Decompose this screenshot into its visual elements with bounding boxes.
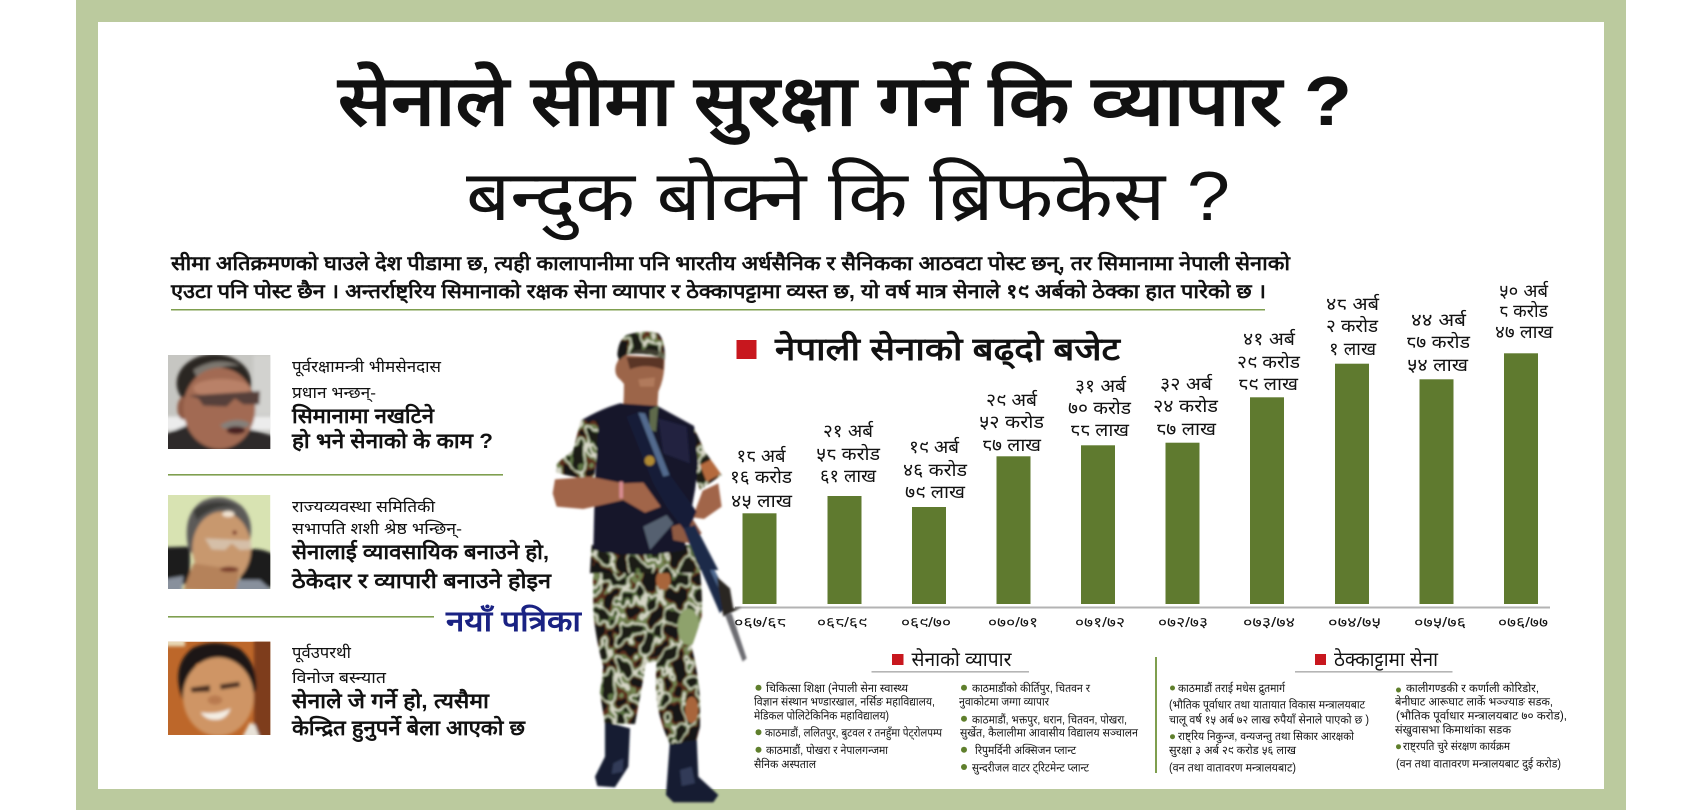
bar values: ६१ लाख xyxy=(820,466,876,486)
contracts list: कालीगण्डकी र कर्णाली कोरिडोर, xyxy=(1406,681,1539,695)
bar values xyxy=(730,280,1553,511)
business list: रिपुमर्दिनी अक्सिजन प्लान्ट xyxy=(975,743,1076,758)
intro text: एउटा पनि पोस्ट छैन । अन्तर्राष्ट्रिय सिमानाको रक्षक सेना व्यापार र ठेक्कापट्टामा व्यस्त छ, यो वर्ष मात्र सेनाले १९ अर्बको ठेक्का हात पारेको छ । xyxy=(170,279,1266,304)
bar values: ४१ अर्ब xyxy=(1243,328,1296,349)
year labels: ०७५/७६ xyxy=(1414,614,1466,630)
bar values: ३२ अर्ब xyxy=(1160,373,1213,394)
bar chart: army budget xyxy=(730,280,1553,630)
bullet markers xyxy=(1170,686,1401,749)
year labels xyxy=(734,614,1548,630)
quote text xyxy=(291,497,552,593)
soldier upper body xyxy=(553,328,723,575)
bar values: ४८ अर्ब xyxy=(1326,293,1380,314)
quote text: ठेकेदार र व्यापारी बनाउने होइन xyxy=(291,568,552,593)
soldier lower body xyxy=(590,543,747,802)
bar values: ८ करोड xyxy=(1499,300,1548,321)
contracts list: बेनीघाट आरूघाट लार्के भञ्ज्याङ सडक, xyxy=(1395,695,1553,709)
business list: सैनिक अस्पताल xyxy=(754,757,816,771)
year labels: ०७६/७७ xyxy=(1498,614,1548,630)
newspaper name: नयाँ पत्रिका xyxy=(445,604,583,638)
contracts list: काठमाडौं तराई मधेस द्रुतमार्ग xyxy=(1178,681,1286,696)
year labels: ०६८/६९ xyxy=(817,614,867,630)
section heading: ठेक्काट्टामा सेना xyxy=(1334,648,1439,671)
bar values: ५८ करोड xyxy=(816,443,880,464)
bar values: ८७ लाख xyxy=(982,435,1041,455)
trousers xyxy=(590,543,707,750)
section heading xyxy=(1295,648,1452,673)
quote: Binoj Basnyat xyxy=(163,638,526,743)
bar values: ८८ लाख xyxy=(1070,420,1129,440)
business list: सुर्खेत, कैलालीमा आवासीय विद्यालय सञ्चालन xyxy=(960,726,1139,741)
business list: काठमाडौं, पोखरा र नेपालगन्जमा xyxy=(766,743,889,757)
bar values: २९ करोड xyxy=(1237,351,1300,372)
bar values: ४६ करोड xyxy=(903,459,967,480)
bar values: ८९ लाख xyxy=(1238,374,1298,394)
right arm xyxy=(693,483,722,519)
business list: विज्ञान संस्थान भण्डारखाल, नर्सिङ महाविद्यालय, xyxy=(754,695,935,709)
business list: नुवाकोटमा जग्गा व्यापार xyxy=(959,695,1049,710)
contracts list: (वन तथा वातावरण मन्त्रालयबाट दुई करोड) xyxy=(1396,756,1561,771)
bar values: ४४ अर्ब xyxy=(1411,309,1467,330)
year labels: ०७२/७३ xyxy=(1158,614,1208,630)
title: सेनाले सीमा सुरक्षा गर्ने कि व्यापार ? xyxy=(336,61,1352,145)
contracts list: (भौतिक पूर्वाधार मन्त्रालयबाट ७० करोड), xyxy=(1396,708,1567,723)
quote text: हो भने सेनाको के काम ? xyxy=(291,428,493,453)
quote text: प्रधान भन्छन्- xyxy=(292,385,376,403)
year labels: ०७३/७४ xyxy=(1243,614,1295,630)
bar values: ३१ अर्ब xyxy=(1075,375,1127,396)
bullet markers xyxy=(756,685,967,770)
quote text: केन्द्रित हुनुपर्ने बेला आएको छ xyxy=(291,715,526,743)
chart heading: नेपाली सेनाको बढ्दो बजेट xyxy=(774,330,1122,369)
bar values: ७९ लाख xyxy=(905,482,965,502)
cap xyxy=(615,328,667,362)
intro text: सीमा अतिक्रमणको घाउले देश पीडामा छ, त्यही कालापानीमा पनि भारतीय अर्धसैनिक र सैनिकका आठवटा पोस्ट छन्, तर सिमानामा नेपाली सेनाको xyxy=(170,251,1291,276)
bar values: ८७ लाख xyxy=(1156,419,1216,439)
bar values: ५४ लाख xyxy=(1407,355,1468,375)
business list: मेडिकल पोलिटेकिनिक महाविद्यालय) xyxy=(754,708,889,722)
quote text: विनोज बस्न्यात xyxy=(292,668,387,687)
quote text: सेनाले जे गर्ने हो, त्यसैमा xyxy=(291,688,491,713)
left arm xyxy=(553,477,661,513)
bar values: ४५ लाख xyxy=(731,491,792,511)
quote: Shashi Shrestha xyxy=(163,495,552,593)
contracts list: राष्ट्रपति चुरे संरक्षण कार्यक्रम xyxy=(1403,739,1511,754)
bars xyxy=(742,353,1538,604)
title: बन्दुक बोक्ने कि ब्रिफकेस ? xyxy=(466,157,1230,241)
quote text: पूर्वरक्षामन्त्री भीमसेनदास xyxy=(292,357,442,377)
business list xyxy=(754,681,1139,775)
contracts list: राष्ट्रिय निकुन्ज, वन्यजन्तु तथा सिकार आरक्षको xyxy=(1178,729,1355,744)
contracts list: सुरक्षा ३ अर्ब २९ करोड ५६ लाख xyxy=(1169,743,1297,758)
bar values: १८ अर्ब xyxy=(736,445,787,466)
title xyxy=(336,61,1352,241)
sleeves and waist camo xyxy=(553,418,723,575)
portrait: Binoj Basnyat xyxy=(168,642,270,735)
quote: Bhimsen Das Pradhan xyxy=(160,354,493,455)
business list: काठमाडौं, ललितपुर, बुटवल र तनहुँमा पेट्रोलपम्प xyxy=(765,726,942,741)
quote text: राज्यव्यवस्था समितिकी xyxy=(292,497,436,516)
bar values: २९ अर्ब xyxy=(986,389,1038,410)
contracts list: (वन तथा वातावरण मन्त्रालयबाट) xyxy=(1169,762,1296,774)
portrait: Shashi Shrestha xyxy=(168,495,270,589)
year labels: ०७४/७५ xyxy=(1328,614,1381,630)
section heading: सेनाको व्यापार xyxy=(912,648,1012,671)
bar values: ८७ करोड xyxy=(1406,331,1470,352)
business list: सुन्दरीजल वाटर ट्रिटमेन्ट प्लान्ट xyxy=(972,760,1089,775)
axis xyxy=(735,606,1550,608)
quote text xyxy=(291,357,493,453)
business list: चिकित्सा शिक्षा (नेपाली सेना स्वास्थ्य xyxy=(766,681,908,695)
bar values: २ करोड xyxy=(1326,315,1378,336)
bar values: ५२ करोड xyxy=(979,411,1044,432)
boots xyxy=(595,722,718,802)
section: army business xyxy=(754,648,1139,775)
intro text xyxy=(170,251,1291,304)
year labels: ०७०/७१ xyxy=(988,614,1038,630)
contracts list xyxy=(1169,681,1567,774)
contracts list: चालू वर्ष १५ अर्ब ७२ लाख रुपैयाँ सेनाले पाएको छ ) xyxy=(1169,712,1369,727)
section: army in contracts xyxy=(1169,648,1567,774)
bar values: १ लाख xyxy=(1329,339,1376,359)
quote text: सभापति शशी श्रेष्ठ भन्छिन्- xyxy=(292,519,462,539)
year labels: ०६९/७० xyxy=(901,614,951,630)
rifle barrel xyxy=(692,548,730,613)
quote text: सिमानामा नखटिने xyxy=(291,403,435,428)
bar values: २१ अर्ब xyxy=(823,420,874,441)
section heading xyxy=(872,648,1029,673)
quote text: सेनालाई व्यावसायिक बनाउने हो, xyxy=(291,539,549,564)
bar values: २४ करोड xyxy=(1153,395,1218,416)
bar values: ५० अर्ब xyxy=(1499,280,1549,301)
head xyxy=(615,355,664,407)
quote text: पूर्वउपरथी xyxy=(292,643,352,663)
year labels: ०६७/६८ xyxy=(734,614,786,630)
vest xyxy=(581,403,698,555)
portrait: Bhimsen Das Pradhan xyxy=(168,355,270,449)
contracts list: (भौतिक पूर्वाधार तथा यातायात विकास मन्त्रालयबाट xyxy=(1169,697,1365,712)
contracts list: संखुवासभा किमाथांका सडक xyxy=(1395,722,1511,737)
bar values: ७० करोड xyxy=(1068,397,1131,418)
bar values: १९ अर्ब xyxy=(909,436,960,457)
business list: काठमाडौंको कीर्तिपुर, चितवन र xyxy=(972,681,1090,696)
bar values: ४७ लाख xyxy=(1495,322,1553,342)
quote text xyxy=(291,643,526,743)
bar values: १६ करोड xyxy=(730,466,792,487)
soldier photo illustration xyxy=(553,328,747,802)
business list: काठमाडौं, भक्तपुर, धरान, चितवन, पोखरा, xyxy=(972,712,1127,727)
year labels: ०७१/७२ xyxy=(1075,614,1125,630)
rifle body xyxy=(627,412,697,533)
